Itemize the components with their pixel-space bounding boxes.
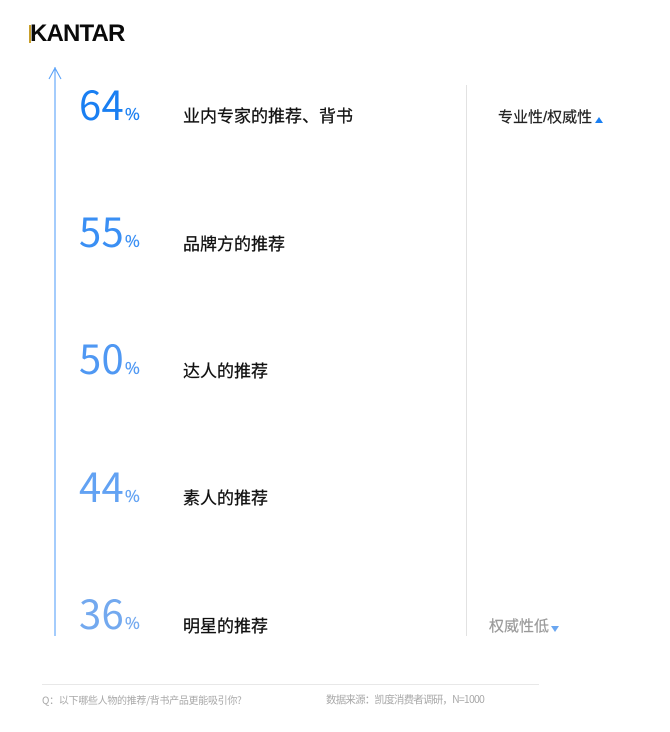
stat: 64%: 64%: [79, 74, 140, 132]
label: 明星: 明星的推荐: [183, 612, 268, 637]
footer question: Q：以下哪些人物的推荐/背书产品更能吸引你?: [42, 692, 241, 707]
logo: KANTAR: KANTAR: [30, 20, 124, 47]
arrow: vertical axis: [48, 67, 62, 636]
vertical divider: [466, 85, 467, 636]
label: high authority: 专业性/权威性: [498, 109, 592, 126]
icon: up triangle: [595, 117, 603, 123]
label: 品牌方: 品牌方的推荐: [183, 230, 285, 255]
icon: down triangle: [551, 626, 559, 632]
stat: 36%: 36%: [79, 583, 140, 641]
stat: 55%: 55%: [79, 201, 140, 259]
label: 素人: 素人的推荐: [183, 484, 268, 509]
footer source: 数据来源：凯度消费者调研，N=1000: [326, 692, 484, 707]
footer divider: [42, 684, 539, 685]
label: 达人: 达人的推荐: [183, 357, 268, 382]
stat: 50%: 50%: [79, 328, 140, 386]
label: low authority: 权威性低: [489, 615, 549, 636]
label: 业内专家: 业内专家的推荐、背书: [183, 102, 353, 127]
stat: 44%: 44%: [79, 456, 140, 514]
